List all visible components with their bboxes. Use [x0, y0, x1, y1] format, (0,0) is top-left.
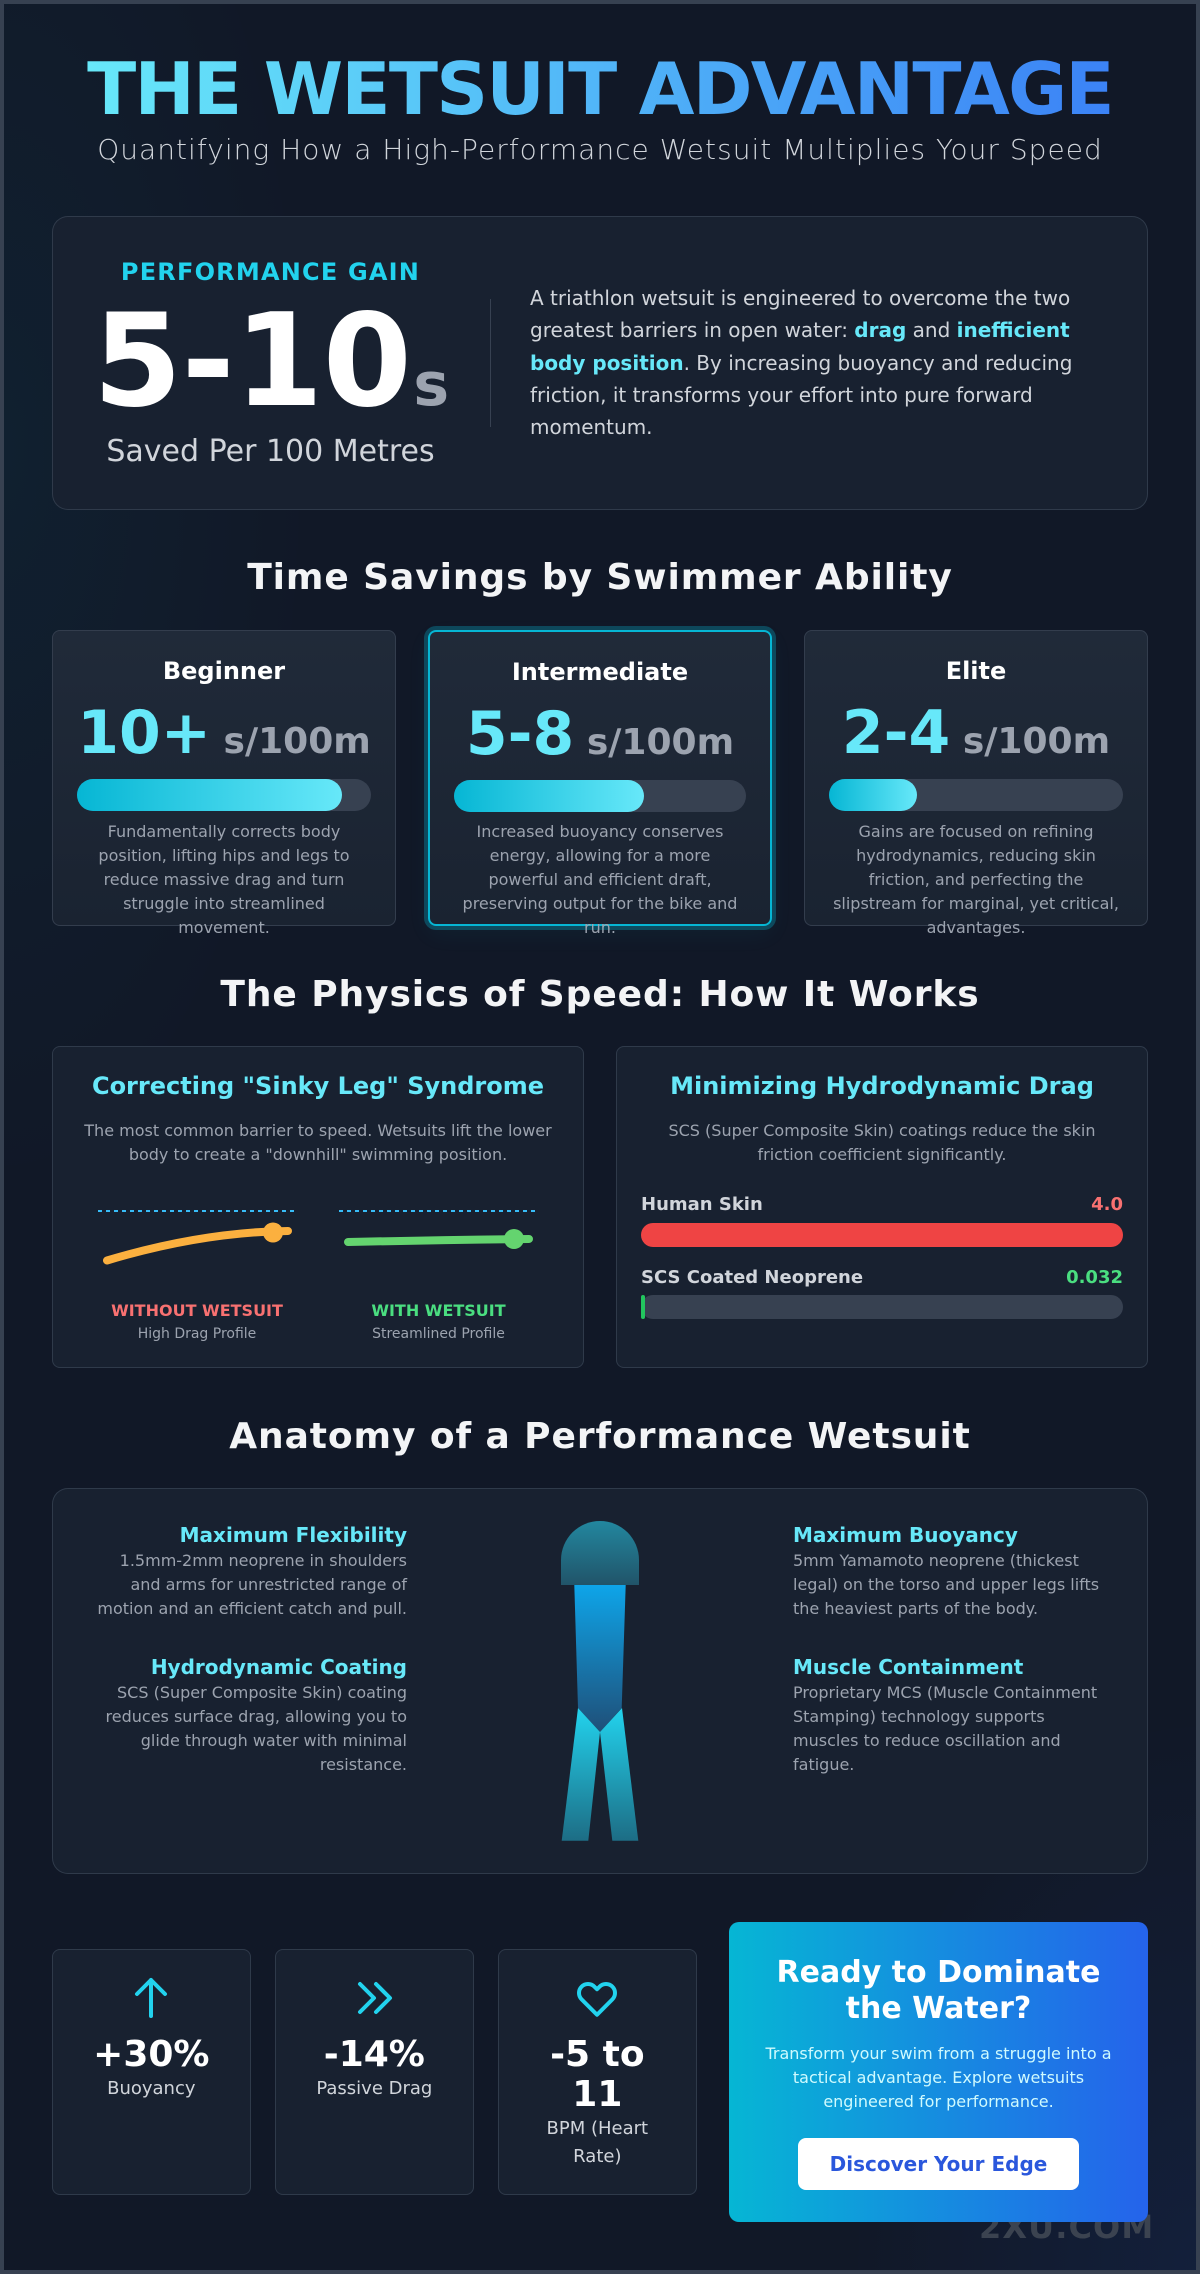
- cta button: Discover Your Edge: [830, 2152, 1047, 2176]
- feature: maximum flexibility: [97, 1523, 408, 1618]
- feature: maximum buoyancy: Maximum Buoyancy: [793, 1523, 1018, 1547]
- description: struggle into streamlined: [123, 894, 325, 913]
- feature: maximum flexibility: and arms for unrestricted range of: [130, 1575, 407, 1594]
- value: 5-8 s/100m: [466, 699, 734, 769]
- value: -14%: [324, 2034, 425, 2075]
- feature: hydrodynamic coating: reduces surface drag, allowing you to: [106, 1707, 407, 1726]
- description: run.: [584, 918, 616, 937]
- feature: maximum flexibility: Maximum Flexibility: [180, 1523, 407, 1547]
- bar: scs neoprene: [641, 1295, 1123, 1319]
- divider: [490, 299, 491, 427]
- cta text: tactical advantage. Explore wetsuits: [793, 2068, 1084, 2086]
- panel: performance gain hero: [52, 216, 1148, 510]
- card: intermediate: [428, 630, 772, 926]
- feature: hydrodynamic coating: [106, 1655, 407, 1774]
- panel title: Correcting "Sinky Leg" Syndrome: [92, 1072, 544, 1100]
- feature: maximum buoyancy: 5mm Yamamoto neoprene (thickest: [793, 1551, 1079, 1570]
- value: 0.032: 0.032: [1066, 1266, 1123, 1288]
- heading: physics: The Physics of Speed: How It Works: [220, 974, 980, 1015]
- left leg: [562, 1708, 600, 1841]
- progress bar: [829, 779, 1123, 811]
- feature: maximum flexibility: 1.5mm-2mm neoprene in shoulders: [120, 1551, 407, 1570]
- cta text: Transform your swim from a struggle into a: [765, 2044, 1112, 2062]
- bar: human skin: [641, 1223, 1123, 1247]
- title: THE WETSUIT ADVANTAGE: [87, 47, 1113, 131]
- panel description: [84, 1120, 552, 1164]
- torso: [574, 1585, 626, 1732]
- feature: hydrodynamic coating: Hydrodynamic Coating: [151, 1655, 407, 1679]
- label: with wetsuit: WITH WETSUIT: [371, 1301, 506, 1320]
- panel description: SCS (Super Composite Skin) coatings reduce the skin: [668, 1120, 1096, 1140]
- feature: muscle containment: Muscle Containment: [793, 1655, 1023, 1679]
- progress bar: [454, 780, 746, 812]
- cta heading: Ready to Dominate: [777, 1955, 1100, 1990]
- without wetsuit body: [107, 1222, 288, 1260]
- panel: sinky leg: [52, 1046, 584, 1368]
- panel: hydrodynamic drag: [616, 1046, 1148, 1368]
- sublabel: streamlined: Streamlined Profile: [372, 1326, 505, 1342]
- heading: time savings: Time Savings by Swimmer Ability: [247, 557, 953, 598]
- feature: maximum flexibility: motion and an efficient catch and pull.: [97, 1599, 407, 1618]
- big stat: 5-10s: 5-10s: [93, 287, 449, 436]
- description: Increased buoyancy conserves: [477, 822, 723, 841]
- description: Fundamentally corrects body: [108, 822, 340, 841]
- description: position, lifting hips and legs to: [98, 846, 350, 865]
- intro paragraph: A triathlon wetsuit is engineered to overcome the two: [530, 286, 1070, 310]
- description: hydrodynamics, reducing skin: [856, 846, 1096, 865]
- label: BPM (Heart: [547, 2118, 648, 2138]
- card title: Elite: [946, 657, 1006, 685]
- caption: saved per 100 metres: Saved Per 100 Metres: [106, 434, 435, 469]
- label: [547, 2118, 648, 2166]
- feature: hydrodynamic coating: resistance.: [320, 1755, 407, 1774]
- feature: muscle containment: fatigue.: [793, 1755, 854, 1774]
- subtitle: Quantifying How a High-Performance Wetsuit Multiplies Your Speed: [97, 133, 1103, 166]
- description: preserving output for the bike and: [463, 894, 737, 913]
- panel title: Minimizing Hydrodynamic Drag: [670, 1072, 1094, 1100]
- progress bar: [77, 779, 371, 811]
- intro paragraph: momentum.: [530, 415, 653, 439]
- feature: muscle containment: Proprietary MCS (Muscle Containment: [793, 1683, 1097, 1702]
- description: [98, 822, 350, 937]
- call to action: [729, 1922, 1148, 2222]
- value: 10+ s/100m: [77, 698, 371, 768]
- value: +30%: [93, 2034, 210, 2075]
- description: energy, allowing for a more: [490, 846, 710, 865]
- sublabel: high drag: High Drag Profile: [138, 1326, 256, 1342]
- description: Gains are focused on refining: [858, 822, 1094, 841]
- description: friction, and perfecting the: [869, 870, 1083, 889]
- panel description: [668, 1120, 1096, 1164]
- cta heading: the Water?: [846, 1991, 1031, 2026]
- cta text: [765, 2044, 1112, 2110]
- panel description: The most common barrier to speed. Wetsuits lift the lower: [84, 1120, 552, 1140]
- hood: [561, 1521, 639, 1585]
- stat: passive drag: [275, 1949, 474, 2195]
- card title: Beginner: [163, 657, 285, 685]
- with wetsuit body: [348, 1229, 529, 1249]
- intro paragraph: body position. By increasing buoyancy and reducing: [530, 351, 1072, 375]
- diagram: body position lines: [98, 1210, 535, 1264]
- description: [833, 822, 1119, 937]
- label: Passive Drag: [316, 2078, 432, 2099]
- intro paragraph: [530, 286, 1072, 439]
- value: 4.0: 4.0: [1091, 1194, 1123, 1215]
- feature: maximum buoyancy: [793, 1523, 1099, 1618]
- description: slipstream for marginal, yet critical,: [833, 894, 1119, 913]
- value: 2-4 s/100m: [842, 698, 1110, 768]
- icon: heart: [577, 1982, 617, 2017]
- stat: heart rate: [498, 1949, 697, 2195]
- watermark: 2XU.COM: [979, 2208, 1154, 2246]
- feature: maximum buoyancy: the heaviest parts of the body.: [793, 1599, 1038, 1618]
- label: Buoyancy: [107, 2078, 196, 2099]
- feature: hydrodynamic coating: SCS (Super Composite Skin) coating: [117, 1683, 407, 1702]
- label: performance gain: PERFORMANCE GAIN: [121, 258, 420, 286]
- card: beginner: [52, 630, 396, 926]
- stat: buoyancy: [52, 1949, 251, 2195]
- feature: maximum buoyancy: legal) on the torso and upper legs lifts: [793, 1575, 1099, 1594]
- description: [463, 822, 737, 937]
- card: elite: [804, 630, 1148, 926]
- panel: anatomy: [52, 1488, 1148, 1874]
- panel description: friction coefficient significantly.: [757, 1144, 1006, 1164]
- icon: arrow up: [134, 1978, 168, 2018]
- description: advantages.: [927, 918, 1025, 937]
- feature: muscle containment: Stamping) technology supports: [793, 1707, 1045, 1726]
- right leg: [600, 1708, 638, 1841]
- description: movement.: [178, 918, 270, 937]
- value: 11: [572, 2074, 622, 2115]
- wetsuit figure: [561, 1521, 639, 1841]
- intro paragraph: greatest barriers in open water: drag and inefficient: [530, 318, 1070, 342]
- description: powerful and efficient draft,: [488, 870, 712, 889]
- panel description: body to create a "downhill" swimming position.: [129, 1144, 507, 1164]
- cta heading: [777, 1955, 1100, 2026]
- label: without wetsuit: WITHOUT WETSUIT: [111, 1301, 283, 1320]
- feature: muscle containment: [793, 1655, 1097, 1774]
- description: reduce massive drag and turn: [104, 870, 344, 889]
- value: -5 to: [550, 2034, 645, 2075]
- icon: chevrons: [358, 1982, 392, 2014]
- label: scs neoprene: SCS Coated Neoprene: [641, 1266, 863, 1288]
- value: [550, 2034, 645, 2115]
- feature: hydrodynamic coating: glide through water with minimal: [141, 1731, 407, 1750]
- label: human skin: Human Skin: [641, 1194, 763, 1215]
- card title: Intermediate: [512, 658, 688, 686]
- feature: muscle containment: muscles to reduce oscillation and: [793, 1731, 1061, 1750]
- cta text: engineered for performance.: [823, 2092, 1054, 2110]
- heading: anatomy: Anatomy of a Performance Wetsuit: [229, 1416, 971, 1457]
- cta button: [798, 2138, 1079, 2190]
- label: Rate): [573, 2146, 621, 2166]
- intro paragraph: friction, it transforms your effort into pure forward: [530, 383, 1033, 407]
